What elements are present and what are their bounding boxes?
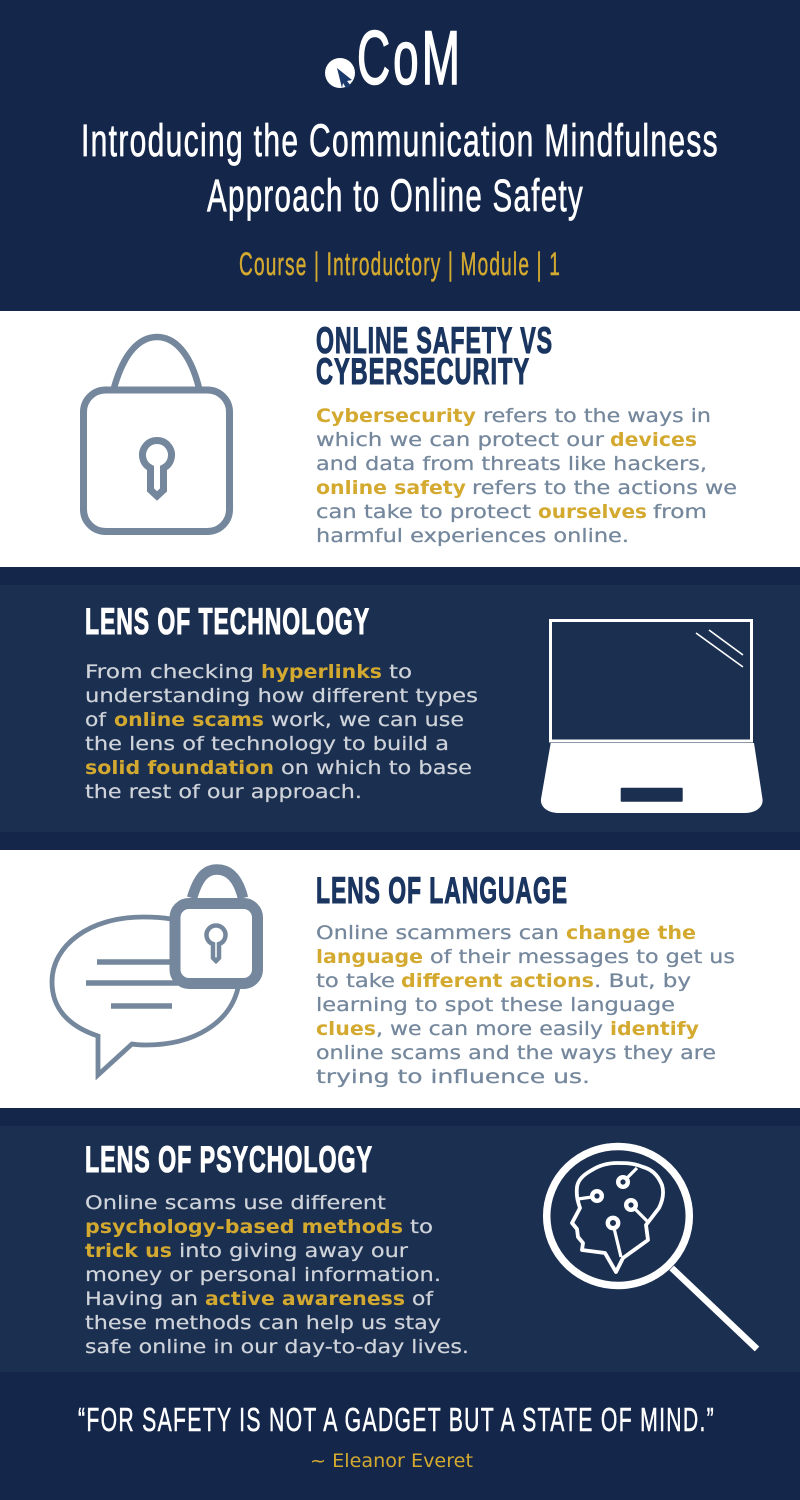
text block: psychology-based methods xyxy=(85,1216,403,1238)
text block: trick us xyxy=(85,1240,172,1262)
text block: into giving away our xyxy=(179,1240,408,1262)
heading: LENS OF LANGUAGE xyxy=(316,870,568,911)
text block: online scams and the ways they are xyxy=(316,1042,716,1064)
icon: chat bubble with padlock xyxy=(52,870,258,1075)
icon: padlock xyxy=(84,337,230,532)
text block: . But, by xyxy=(594,970,691,992)
text block: refers to the actions we xyxy=(472,477,737,499)
text block: clues xyxy=(316,1018,376,1040)
text block: safe online in our day-to-day lives. xyxy=(85,1336,469,1358)
text block: online safety xyxy=(316,477,467,499)
text block: harmful experiences online. xyxy=(316,525,629,547)
heading xyxy=(316,320,553,392)
title: Approach to Online Safety xyxy=(207,170,584,221)
heading: LENS OF PSYCHOLOGY xyxy=(85,1139,373,1180)
panel: online safety vs cybersecurity xyxy=(0,311,800,567)
text block: money or personal information. xyxy=(85,1264,441,1286)
heading: LENS OF TECHNOLOGY xyxy=(85,601,370,642)
text block: Cybersecurity xyxy=(316,405,477,427)
icon: magnifier over head xyxy=(547,1146,757,1349)
text block: active awareness xyxy=(205,1288,405,1310)
text block: on which to base xyxy=(281,757,472,779)
icon: laptop xyxy=(541,620,763,813)
text block: language xyxy=(316,946,423,968)
text block xyxy=(85,1192,469,1358)
text block: and data from threats like hackers, xyxy=(316,453,707,475)
text block: can take to protect xyxy=(316,501,531,523)
text block: of their messages to get us xyxy=(430,946,735,968)
text block: ourselves xyxy=(538,501,647,523)
heading: ONLINE SAFETY VS xyxy=(316,320,553,361)
text block: these methods can help us stay xyxy=(85,1312,441,1334)
text block: solid foundation xyxy=(85,757,274,779)
text block xyxy=(85,661,478,803)
text block: of xyxy=(85,709,107,731)
panel: lens of language xyxy=(0,850,800,1108)
text block: , we can more easily xyxy=(376,1018,603,1040)
text block: learning to spot these language xyxy=(316,994,675,1016)
quote attribution: ~ Eleanor Everet xyxy=(310,1450,473,1472)
text block: online scams xyxy=(114,709,264,731)
text block xyxy=(316,405,737,547)
text block: trying to influence us. xyxy=(316,1066,590,1088)
text block: to xyxy=(410,1216,433,1238)
text block: From checking xyxy=(85,661,254,683)
text block: devices xyxy=(610,429,697,451)
text block: the rest of our approach. xyxy=(85,781,362,803)
text block: to take xyxy=(316,970,395,992)
text block: Having an xyxy=(85,1288,198,1310)
logo: CoM: CoM xyxy=(357,16,463,101)
text block: different actions xyxy=(401,970,594,992)
text block: of xyxy=(412,1288,434,1310)
text block: to xyxy=(389,661,412,683)
text block: refers to the ways in xyxy=(483,405,711,427)
text block: Online scammers can xyxy=(316,922,559,944)
logo: CoM xyxy=(325,16,463,101)
title xyxy=(81,115,719,221)
panel: header xyxy=(0,0,800,311)
text block: hyperlinks xyxy=(261,661,382,683)
text block: from xyxy=(653,501,707,523)
text block: which we can protect our xyxy=(316,429,604,451)
text block xyxy=(316,922,735,1088)
text block: Online scams use different xyxy=(85,1192,386,1214)
panel: lens of psychology xyxy=(0,1126,800,1372)
subtitle: Course | Introductory | Module | 1 xyxy=(239,246,561,282)
text block: the lens of technology to build a xyxy=(85,733,449,755)
text block: understanding how different types xyxy=(85,685,478,707)
text block: identify xyxy=(610,1018,700,1040)
text block: change the xyxy=(566,922,696,944)
text block: work, we can use xyxy=(271,709,464,731)
panel: lens of technology xyxy=(0,585,800,832)
heading: CYBERSECURITY xyxy=(316,351,530,392)
